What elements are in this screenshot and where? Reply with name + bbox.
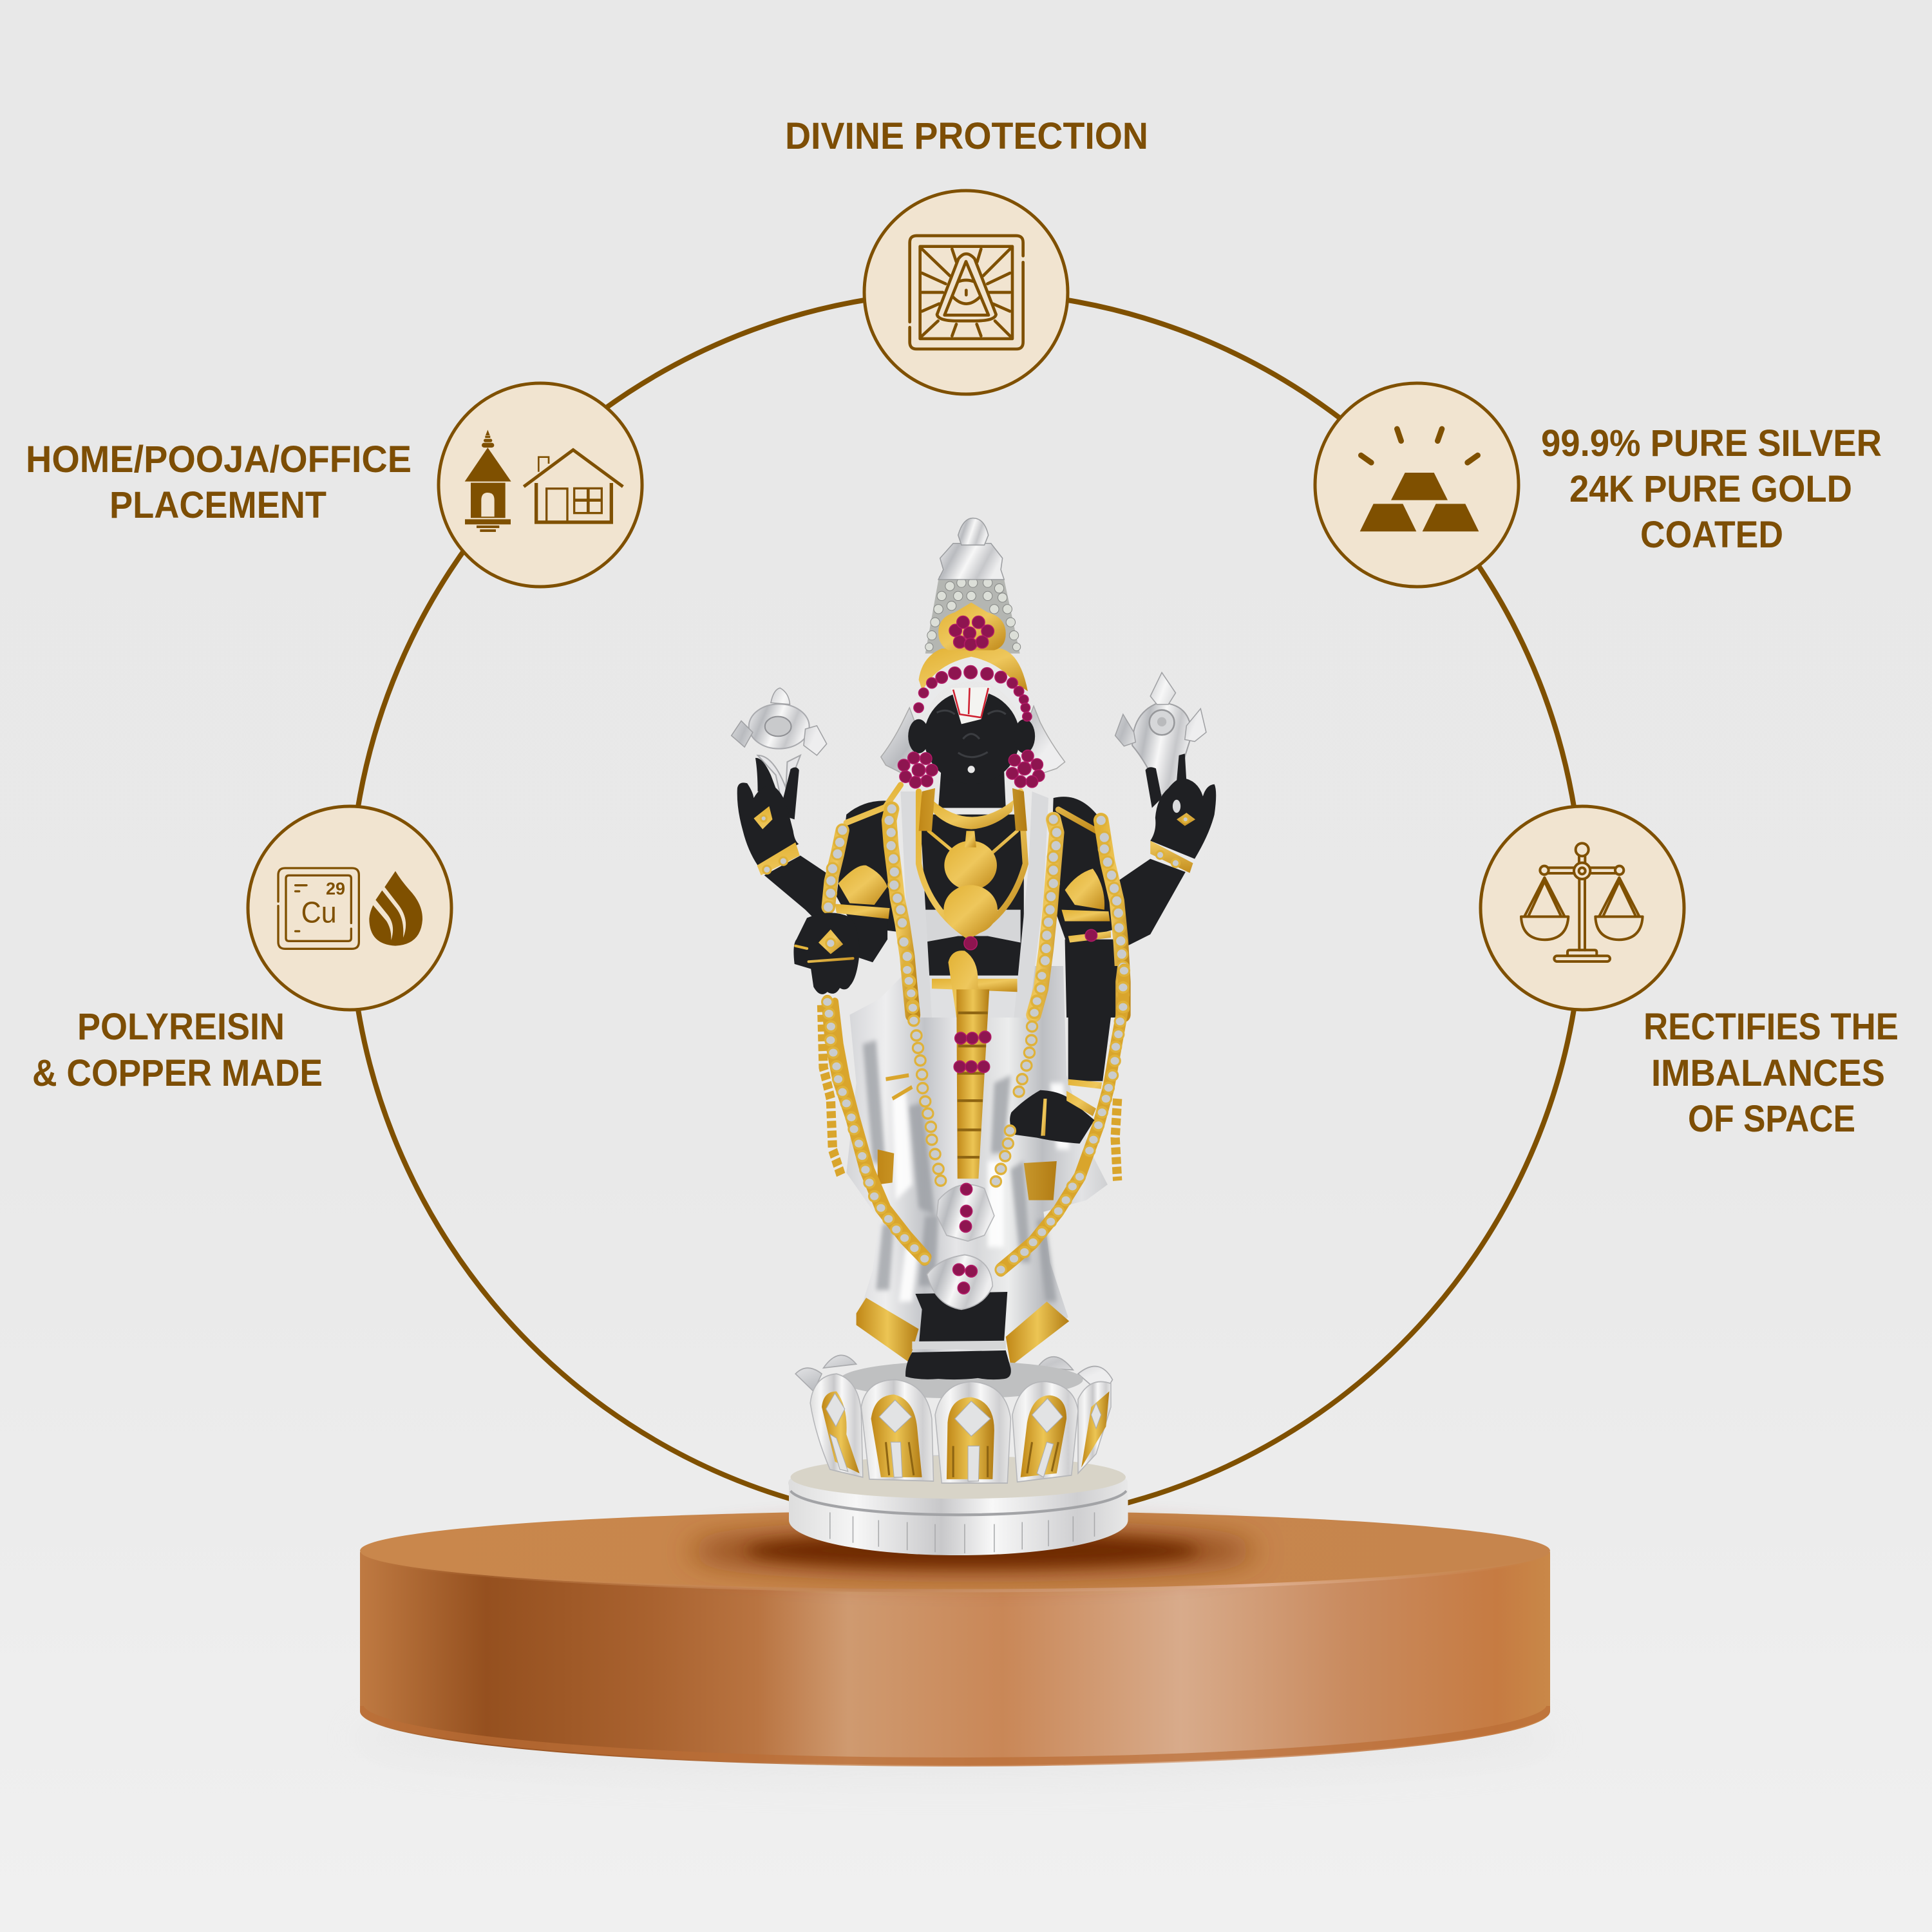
badge circle	[1481, 806, 1684, 1010]
gold garland chains	[835, 1002, 928, 1256]
heading: purity line 2: 24K PURE GOLD	[1569, 468, 1852, 510]
large connecting ring	[350, 292, 1582, 1524]
heading: purity line 3: COATED	[1640, 514, 1783, 556]
badge circle	[864, 191, 1068, 394]
icon: copper element and drop	[278, 868, 422, 949]
face	[924, 690, 1020, 784]
heading: placement line 1: HOME/POOJA/OFFICE	[26, 439, 412, 480]
upper garlands with diamond beads	[793, 803, 1129, 1018]
badge circle	[439, 383, 642, 587]
crown cone	[925, 576, 1020, 654]
torso and shoulders	[837, 772, 1119, 1018]
lower bead chains	[822, 965, 1130, 1274]
cobra and belt	[932, 951, 1018, 1018]
icon: shankha in upper right hand	[1115, 672, 1206, 798]
gold hems	[857, 1298, 919, 1362]
panel: home pooja office placement	[26, 383, 642, 587]
lower right hand	[1010, 1079, 1102, 1144]
heading: vastu line 3: OF SPACE	[1688, 1098, 1855, 1140]
lotus silver diamonds	[826, 1394, 1101, 1481]
panel: divine protection	[785, 115, 1148, 394]
crown gold ornament	[919, 649, 1028, 691]
icon: copper element and drop: 29	[326, 879, 345, 898]
heading: placement line 2: PLACEMENT	[109, 484, 327, 526]
heading: material line 2: & COPPER MADE	[32, 1052, 323, 1094]
crown rubies	[914, 616, 1032, 721]
panel: polyresin and copper	[32, 806, 451, 1094]
icon: temple and house	[465, 430, 623, 532]
lower body details	[788, 965, 1130, 1555]
statue lower drapery (silver dhoti)	[846, 966, 1108, 1366]
heading: vastu line 1: RECTIFIES THE	[1643, 1006, 1899, 1048]
legs and feet	[912, 1292, 1007, 1349]
gold Lakshmi pendant	[943, 831, 998, 934]
upper arm hands and forearms	[737, 753, 1216, 947]
heading: purity line 1: 99.9% PURE SILVER	[1541, 422, 1882, 464]
lower left hand	[793, 913, 859, 994]
icon: pyramid eye	[910, 236, 1023, 349]
icon: copper element and drop: Cu	[301, 896, 337, 929]
gold armlets	[835, 866, 1111, 943]
icon: chakra in upper left hand	[732, 518, 1216, 1018]
panel: pure silver and gold	[1315, 383, 1882, 587]
ruby earrings	[898, 750, 1045, 788]
heading: divine protection: DIVINE PROTECTION	[785, 115, 1148, 157]
gold centre strip	[956, 989, 989, 1179]
silver band	[915, 657, 1032, 721]
silver cloth and sash	[922, 910, 1021, 943]
statue	[732, 518, 1216, 1555]
badge circle	[248, 806, 451, 1010]
crown tier and finial	[938, 518, 1004, 580]
gold long necklace	[919, 791, 1025, 936]
namam forehead mark	[951, 687, 990, 724]
lotus base	[788, 1350, 1128, 1555]
badge circle	[1315, 383, 1519, 587]
feet	[905, 1350, 1011, 1379]
front lotus petals	[810, 1374, 1111, 1483]
gold outer beaded fringes	[822, 1005, 1117, 1180]
panel: rectifies imbalances	[1481, 806, 1899, 1140]
right lower arm	[1068, 966, 1117, 1081]
heading: vastu line 2: IMBALANCES	[1651, 1052, 1885, 1094]
statue shadow on pedestal	[689, 1529, 1256, 1573]
icon: balance scales	[1521, 843, 1643, 961]
side hair ornaments	[881, 706, 1065, 775]
ruby beads	[953, 1031, 991, 1294]
icon: gold bars	[1360, 429, 1479, 531]
base disc	[789, 1485, 1128, 1555]
heading: material line 1: POLYREISIN	[77, 1006, 285, 1048]
gold shoulder trim	[846, 785, 1099, 833]
pedestal: copper cylinder	[350, 1511, 1560, 1777]
silver sash ornaments	[937, 1184, 994, 1241]
